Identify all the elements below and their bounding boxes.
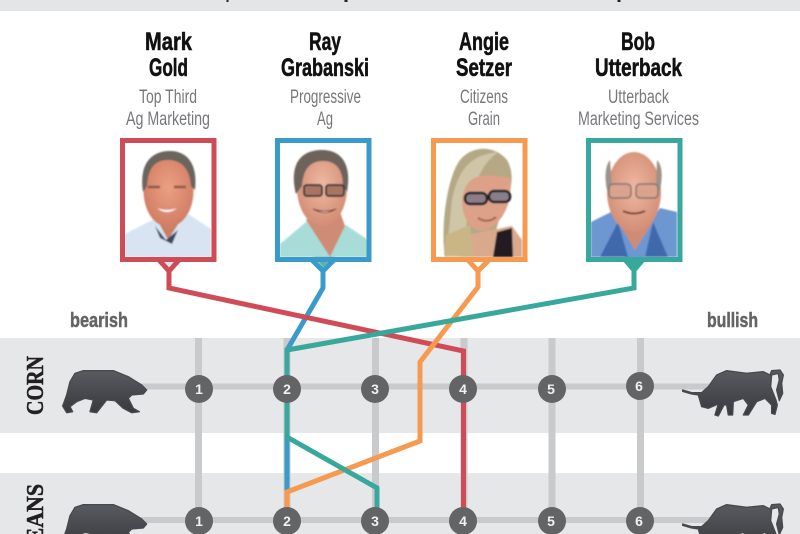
portrait: Bob Utterback bbox=[591, 152, 677, 270]
analyst: Angie Setzer: Setzer bbox=[456, 54, 512, 82]
corn scale markers bbox=[185, 372, 654, 403]
analyst: Mark Gold bbox=[126, 28, 210, 130]
icon: soybeans bear bbox=[63, 505, 147, 534]
soybeans scale markers: 1 bbox=[195, 513, 203, 529]
soybeans scale markers bbox=[185, 507, 654, 534]
corn scale markers: 1 bbox=[195, 381, 203, 397]
icon: corn bear bbox=[63, 371, 147, 413]
frame: Angie Setzer bbox=[434, 140, 525, 260]
analyst: Angie Setzer: Angie bbox=[459, 28, 509, 56]
connector: Bob Utterback teal path bbox=[287, 260, 646, 512]
band: soybeans bbox=[0, 473, 800, 534]
analyst: Angie Setzer: Grain bbox=[468, 109, 500, 130]
icon: soybeans bull bbox=[683, 504, 783, 534]
connector: Ray Grabanski blue path bbox=[287, 260, 334, 495]
band: corn bbox=[0, 338, 800, 433]
analyst: Ray Grabanski: Ray bbox=[309, 28, 341, 56]
label: bullish: bullish bbox=[707, 310, 758, 332]
soybeans scale markers: 2 bbox=[283, 513, 291, 529]
icon: corn bull bbox=[683, 370, 783, 416]
analyst: Mark Gold: Ag Marketing bbox=[126, 109, 210, 130]
soybeans scale markers: 5 bbox=[547, 513, 555, 529]
soybeans scale markers: 4 bbox=[459, 513, 467, 529]
analyst: Angie Setzer bbox=[456, 28, 512, 130]
label: CORN: CORN bbox=[23, 355, 49, 415]
corn scale markers: 3 bbox=[371, 381, 379, 397]
analyst: Mark Gold: Gold bbox=[149, 54, 188, 82]
label: bearish: bearish bbox=[70, 310, 128, 332]
frame: Mark Gold bbox=[122, 140, 214, 260]
analyst: Bob Utterback bbox=[578, 28, 699, 130]
corn scale markers: 4 bbox=[459, 381, 467, 397]
analyst: Ray Grabanski bbox=[281, 28, 369, 130]
analyst: Bob Utterback: Bob bbox=[621, 28, 655, 56]
connector: Mark Gold red path bbox=[159, 260, 464, 510]
analyst: Bob Utterback: Utterback bbox=[608, 87, 669, 108]
corn scale markers: 5 bbox=[547, 381, 555, 397]
portrait: Ray Grabanski bbox=[280, 150, 368, 270]
corn scale markers: 6 bbox=[635, 378, 643, 394]
corn scale markers: 2 bbox=[283, 381, 291, 397]
top title band bbox=[0, 0, 800, 11]
soybeans scale markers: 3 bbox=[371, 513, 379, 529]
frame: Bob Utterback bbox=[588, 140, 680, 260]
portrait: Mark Gold bbox=[125, 151, 211, 268]
scale grid lines bbox=[140, 338, 710, 534]
analyst: Mark Gold: Mark bbox=[145, 28, 192, 56]
portrait: Angie Setzer bbox=[443, 149, 522, 257]
analyst: Ray Grabanski: Ag bbox=[317, 109, 333, 130]
analyst: Angie Setzer: Citizens bbox=[460, 87, 508, 108]
analyst: Bob Utterback: Marketing Services bbox=[578, 109, 699, 130]
soybeans scale markers: 6 bbox=[635, 513, 643, 529]
analyst: Bob Utterback: Utterback bbox=[595, 54, 682, 82]
frame: Ray Grabanski bbox=[278, 140, 369, 260]
analyst: Ray Grabanski: Progressive bbox=[290, 87, 361, 108]
analyst: Mark Gold: Top Third bbox=[139, 87, 197, 108]
connector: Angie Setzer orange path bbox=[287, 260, 489, 512]
analyst: Ray Grabanski: Grabanski bbox=[281, 54, 369, 82]
